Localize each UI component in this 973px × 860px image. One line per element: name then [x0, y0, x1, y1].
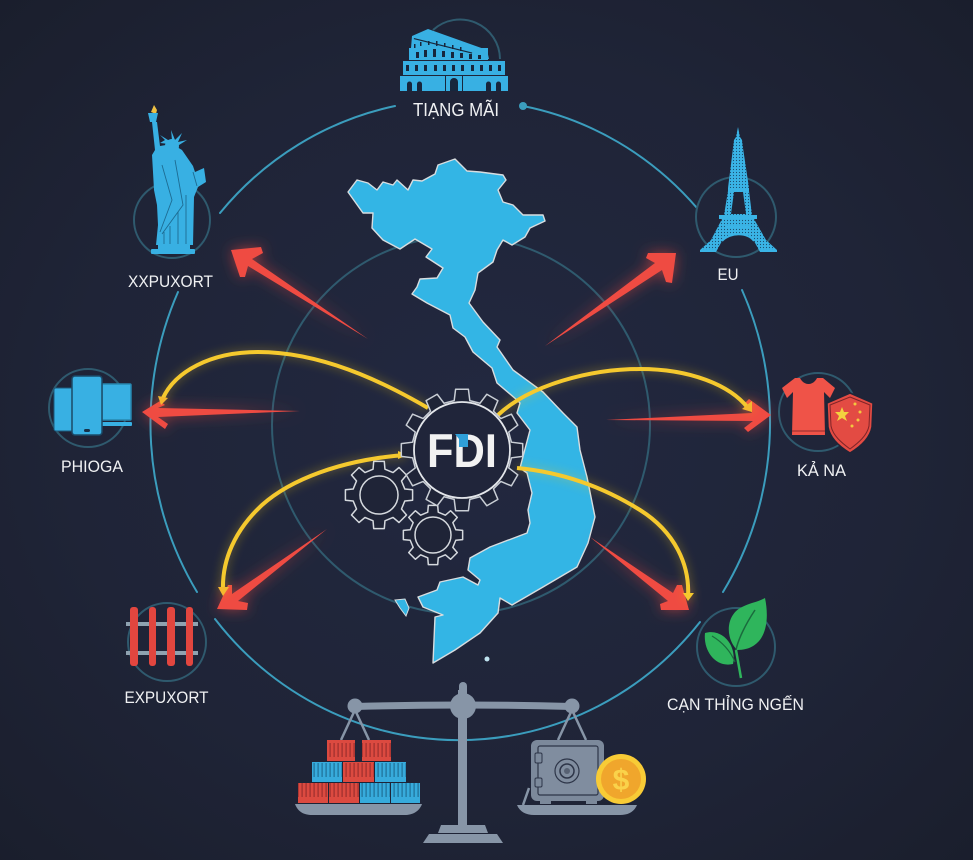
icon: statue of liberty — [134, 105, 210, 258]
icon: green leaves — [697, 598, 775, 686]
small gear left — [345, 461, 413, 529]
icon: colosseum trade building — [400, 20, 508, 91]
icon: rail fence — [126, 603, 206, 681]
map of Vietnam — [348, 159, 595, 663]
arrow: yellow curve to south-west — [218, 451, 408, 596]
inner orbit ring — [272, 236, 650, 614]
arrow: yellow curve to east — [498, 369, 752, 415]
label: EXPUXORT: EXPUXORT — [124, 688, 208, 707]
arrow: red east — [606, 399, 771, 432]
scale: post and base — [348, 682, 580, 843]
scale: right pan with safe and coin — [517, 740, 646, 815]
label: PHIOGA: PHIOGA — [61, 457, 124, 476]
arrow: red south-east — [590, 537, 689, 610]
main FDI gear — [401, 389, 523, 511]
outer orbit ring segments — [150, 102, 770, 740]
arrow: red west — [142, 401, 300, 429]
scale: left pan with containers — [295, 740, 422, 815]
arrow: red north-west — [231, 247, 368, 339]
icon: phones and laptop — [49, 369, 132, 447]
FDI logo text: FDI — [427, 424, 497, 477]
balance scale — [295, 682, 646, 843]
label: KẢ NA: KẢ NA — [797, 461, 847, 480]
arrow: red north-east — [545, 253, 676, 346]
arrow: red south-west — [217, 529, 327, 610]
coin: $ — [613, 764, 630, 797]
label: EU: EU — [718, 265, 738, 284]
arrow: yellow curve to south-east — [517, 468, 694, 601]
label: XXPUXORT: XXPUXORT — [128, 272, 213, 291]
icon: shirt and China shield — [779, 373, 873, 453]
icon: eiffel tower — [696, 127, 777, 257]
label: TIẠNG MÃI: TIẠNG MÃI — [413, 99, 499, 120]
small gear bottom — [403, 505, 463, 565]
arrow: yellow curve to west — [158, 352, 428, 408]
scale: hanging strings — [341, 712, 586, 805]
label: CẠN THỈNG NGẾN: CẠN THỈNG NGẾN — [667, 695, 804, 714]
